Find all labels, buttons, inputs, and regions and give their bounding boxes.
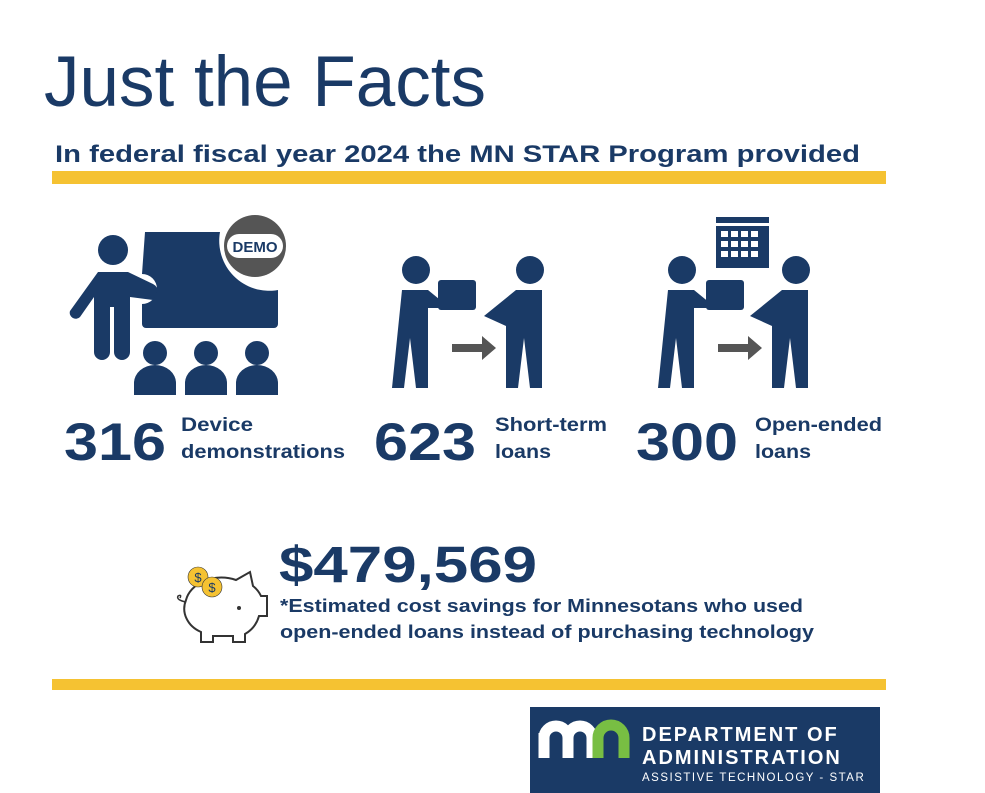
logo: department of administration: ASSISTIVE TECHNOLOGY - STAR	[642, 772, 865, 784]
logo: department of administration: DEPARTMENT OF	[642, 724, 839, 746]
logo: department of administration	[530, 707, 880, 793]
stat: 300 open-ended loans: loans	[755, 442, 811, 463]
stat: 623 short-term loans: loans	[495, 442, 551, 463]
icon: piggy bank: $	[208, 580, 216, 595]
icon: demo presentation	[70, 215, 286, 395]
stat: cost savings: $479,569	[279, 536, 537, 593]
stat: 300 open-ended loans: Open-ended	[755, 415, 882, 436]
logo: department of administration: ADMINISTRATION	[642, 747, 842, 769]
stat: cost savings: open-ended loans instead of purchasing technology	[280, 621, 815, 642]
stat: 316 device demonstrations: Device	[181, 415, 253, 436]
stat: 300 open-ended loans: 300	[636, 413, 738, 472]
subtitle: In federal fiscal year 2024 the MN STAR Program provided	[55, 141, 860, 168]
icon: demo badge	[224, 215, 286, 277]
stat: 300 open-ended loans	[636, 413, 882, 472]
stat: cost savings	[279, 536, 815, 642]
stat: 623 short-term loans	[374, 413, 607, 472]
stat: 623 short-term loans: 623	[374, 413, 476, 472]
stat: 316 device demonstrations: 316	[64, 413, 166, 472]
stat: 316 device demonstrations	[64, 413, 345, 472]
title: Just the Facts	[44, 43, 486, 122]
icon: demo badge: DEMO	[232, 239, 278, 256]
icon: piggy bank: $	[194, 570, 202, 585]
icon: piggy bank	[178, 567, 267, 642]
icon: short-term loan handoff	[392, 256, 544, 388]
stat: cost savings: *Estimated cost savings for Minnesotans who used	[280, 595, 803, 616]
stat: 623 short-term loans: Short-term	[495, 415, 607, 436]
icon: open-ended loan with calendar	[658, 217, 810, 388]
stat: 316 device demonstrations: demonstrations	[181, 442, 345, 463]
